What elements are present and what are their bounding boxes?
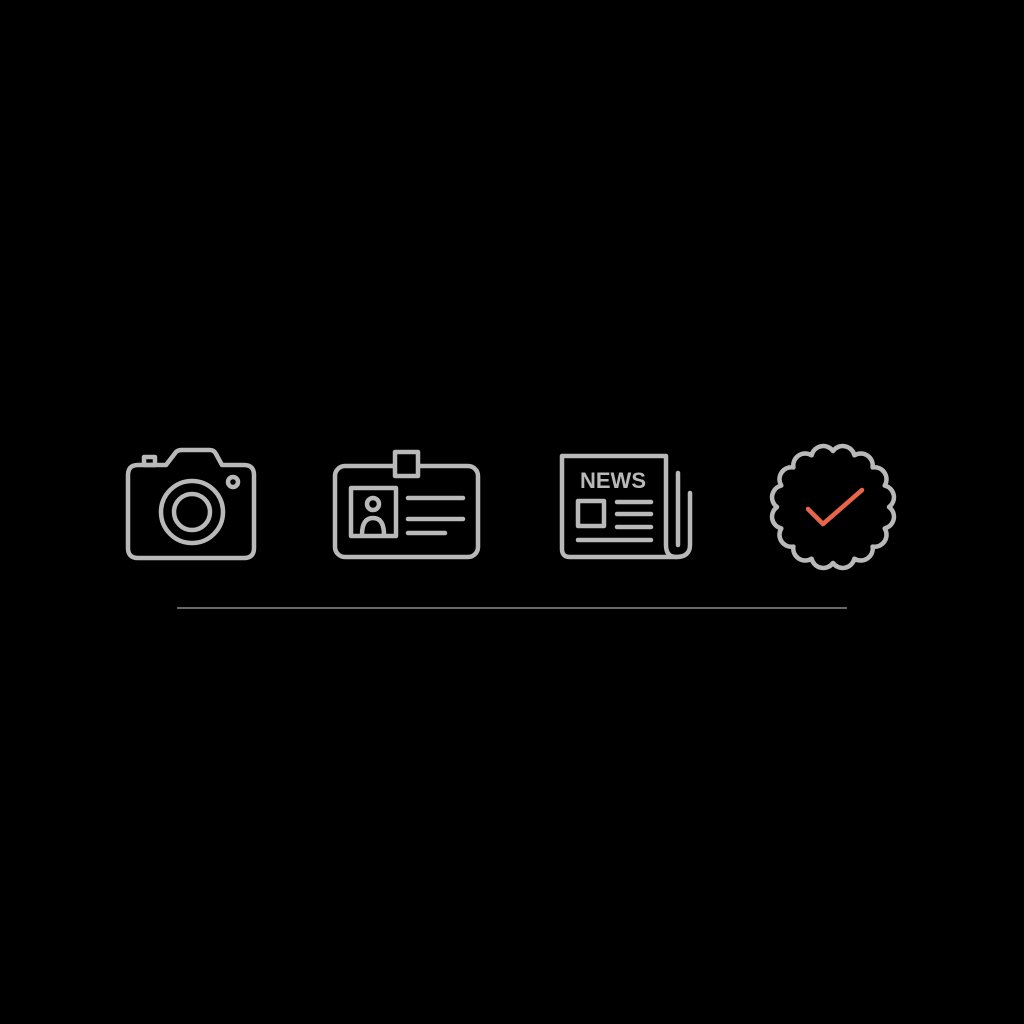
icon: ID badge [335,452,478,557]
icon: newspaper [562,456,690,557]
icon: camera [128,450,254,558]
icon: verified badge with check [772,446,894,568]
divider line [177,607,847,609]
icon: newspaper: NEWS [580,468,646,493]
